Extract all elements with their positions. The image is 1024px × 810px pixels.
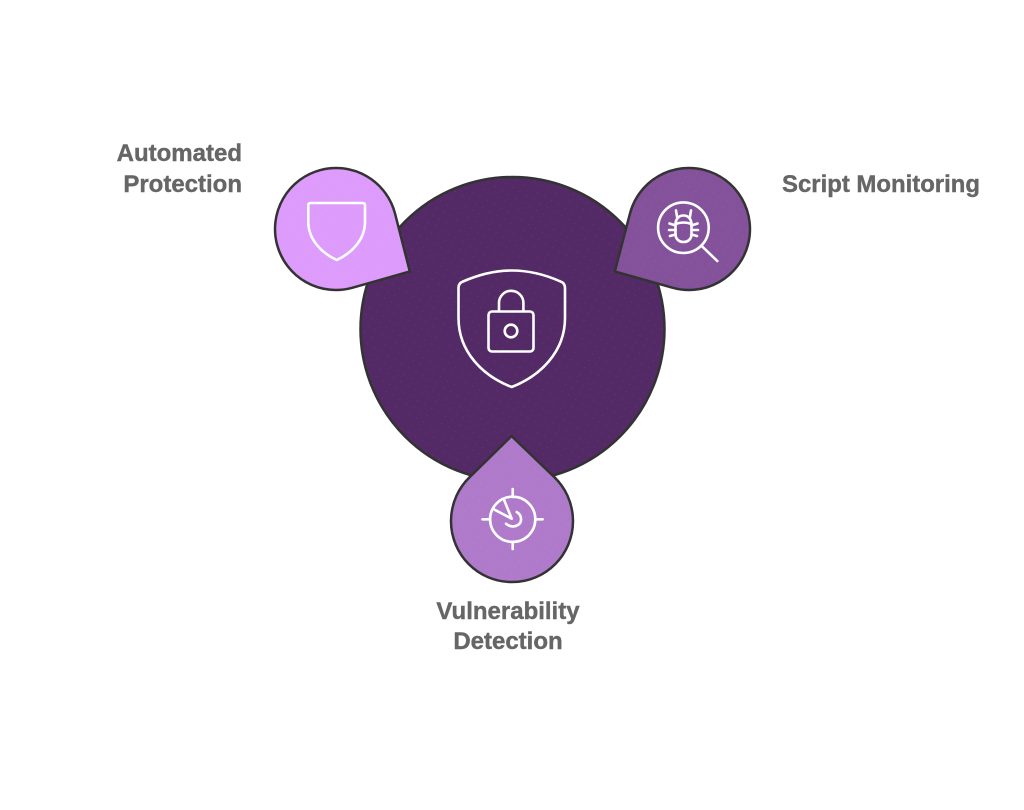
label: automated protection: Automated [117, 140, 242, 167]
drop: script monitoring [615, 168, 750, 290]
label: automated protection: Protection [123, 171, 242, 198]
icon: radar target [482, 489, 543, 549]
drop: automated protection [275, 168, 410, 290]
icon: bug under magnifier [658, 202, 717, 261]
central circle [360, 177, 664, 481]
icon: shield [308, 203, 365, 260]
drop: vulnerability detection [451, 436, 573, 582]
label: script monitoring: Script Monitoring [782, 171, 980, 198]
label: vulnerability detection: Vulnerability [436, 598, 580, 625]
icon: shield with padlock [458, 270, 565, 387]
label: vulnerability detection: Detection [453, 628, 563, 655]
